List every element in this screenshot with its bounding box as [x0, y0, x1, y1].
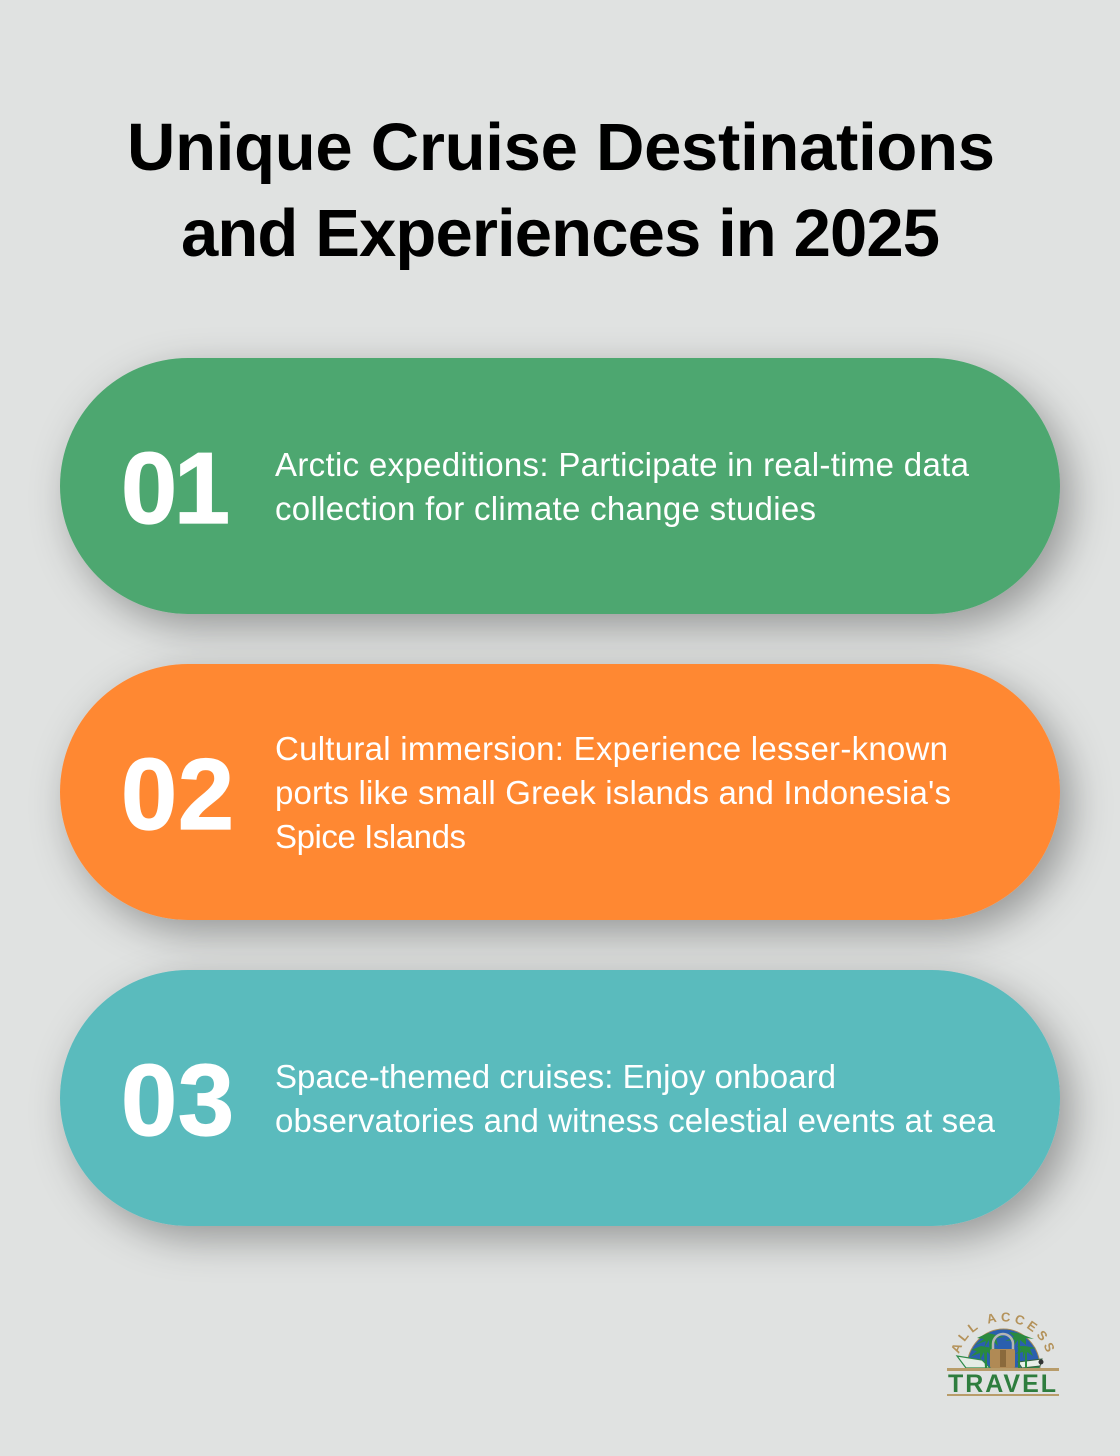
- title: [127, 110, 995, 271]
- icon: dome: [967, 1329, 1040, 1368]
- text block: arctic expeditions: [275, 446, 970, 527]
- icon: ground: [1020, 1363, 1040, 1368]
- title: and Experiences in 2025: [181, 196, 940, 271]
- logo arc text: [959, 1321, 1047, 1354]
- text block: cultural immersion: ports like small Greek islands and Indonesia's: [275, 774, 951, 811]
- logo: All Access Travel: ALL ACCESS: [952, 1312, 1054, 1354]
- icon: padlock: [990, 1334, 1015, 1368]
- text block: cultural immersion: Cultural immersion: Experience lesser-known: [275, 730, 948, 767]
- logo wordmark: TRAVEL: [948, 1370, 1059, 1398]
- number 02: 02: [121, 739, 234, 851]
- logo: All Access Travel: [947, 1312, 1059, 1398]
- text block: space-themed cruises: observatories and witness celestial events at sea: [275, 1102, 996, 1139]
- pill: orange: [60, 664, 1060, 920]
- icon: boat right: [1018, 1359, 1042, 1368]
- number 01: 01: [121, 433, 230, 545]
- text block: space-themed cruises: Space-themed cruises: Enjoy onboard: [275, 1058, 836, 1095]
- text block: space-themed cruises: [275, 1058, 996, 1139]
- text block: arctic expeditions: collection for climate change studies: [275, 490, 816, 527]
- panel: step 02 cultural immersion: [60, 664, 1060, 920]
- pill: teal: [60, 970, 1060, 1226]
- text block: cultural immersion: Spice Islands: [275, 818, 466, 855]
- number 03: 03: [121, 1045, 234, 1157]
- panel: step 03 space-themed cruises: [60, 970, 1060, 1226]
- pill: green: [60, 358, 1060, 614]
- icon: palms: [970, 1332, 1036, 1368]
- text block: arctic expeditions: Arctic expeditions: Participate in real-time data: [275, 446, 970, 483]
- title: Unique Cruise Destinations: [127, 110, 995, 185]
- panel: step 01 arctic expeditions: [60, 358, 1060, 614]
- icon: boat left: [957, 1356, 990, 1368]
- logo rules: [947, 1368, 1059, 1396]
- text block: cultural immersion: [275, 730, 951, 855]
